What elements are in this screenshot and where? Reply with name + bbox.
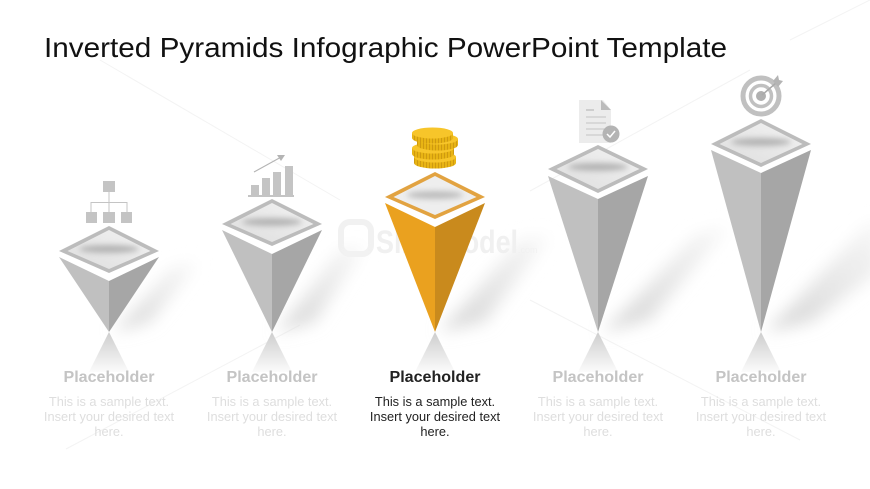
caption 3: highlighted: here. — [420, 424, 450, 439]
caption 2: This is a sample text. — [212, 394, 332, 409]
caption 2: here. — [257, 424, 287, 439]
icon: target with arrow — [743, 75, 783, 114]
pyramid 4: document — [548, 145, 730, 372]
caption 3: highlighted: Insert your desired text — [370, 409, 501, 424]
caption 4: Placeholder — [552, 369, 644, 386]
watermark: .com — [518, 245, 538, 255]
icon: document with check — [579, 100, 620, 143]
caption 4: Insert your desired text — [533, 409, 664, 424]
pyramid 3: highlighted gold — [385, 172, 550, 372]
pyramid 1: organization — [59, 226, 198, 372]
caption 2 — [207, 369, 338, 439]
caption 3: highlighted — [370, 369, 501, 439]
caption 1: here. — [94, 424, 124, 439]
caption 5 — [696, 369, 827, 439]
icon: bar chart with arrow — [248, 155, 294, 197]
pyramid 2: growth — [222, 199, 365, 372]
caption 1: This is a sample text. — [49, 394, 169, 409]
caption 1 — [44, 369, 175, 439]
caption 1: Placeholder — [64, 369, 154, 386]
title: Inverted Pyramids Infographic PowerPoint Template — [44, 32, 727, 63]
icon: gold coins — [412, 128, 458, 168]
caption 5: Insert your desired text — [696, 409, 827, 424]
caption 3: highlighted: Placeholder — [390, 369, 480, 386]
pyramid 5: target — [711, 119, 870, 372]
caption 4 — [533, 369, 664, 439]
caption 2: Placeholder — [226, 369, 318, 386]
caption 5: Placeholder — [716, 369, 806, 386]
caption 4: here. — [583, 424, 613, 439]
caption 5: This is a sample text. — [701, 394, 821, 409]
caption 3: highlighted: This is a sample text. — [375, 394, 495, 409]
caption 1: Insert your desired text — [44, 409, 175, 424]
caption 5: here. — [746, 424, 776, 439]
watermark: SlideModel — [376, 224, 518, 260]
caption 4: This is a sample text. — [538, 394, 658, 409]
caption 2: Insert your desired text — [207, 409, 338, 424]
icon: org chart — [86, 181, 132, 223]
